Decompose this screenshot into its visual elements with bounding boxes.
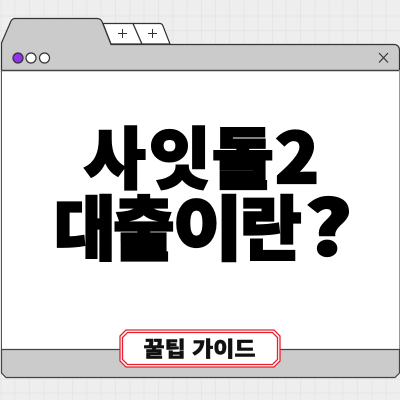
icon: white window dot	[26, 53, 36, 63]
icon: white window dot	[40, 53, 50, 63]
window title bar with active tab	[2, 18, 400, 71]
badge: tip guide: 꿀팁 가이드	[144, 334, 256, 364]
title: 사잇돌	[84, 106, 274, 203]
badge: tip guide	[120, 330, 280, 367]
title: 2	[275, 104, 319, 203]
window footer bar	[2, 350, 400, 378]
title: 란	[240, 173, 302, 274]
title: 대출	[54, 173, 175, 274]
icon: close	[379, 53, 388, 62]
inactive tab 1	[103, 24, 142, 44]
inactive tab 2	[133, 24, 170, 44]
icon: purple window dot	[13, 53, 23, 63]
title: 이	[173, 174, 243, 274]
window content area	[2, 70, 400, 350]
title: ?	[305, 169, 352, 277]
title	[54, 104, 352, 277]
